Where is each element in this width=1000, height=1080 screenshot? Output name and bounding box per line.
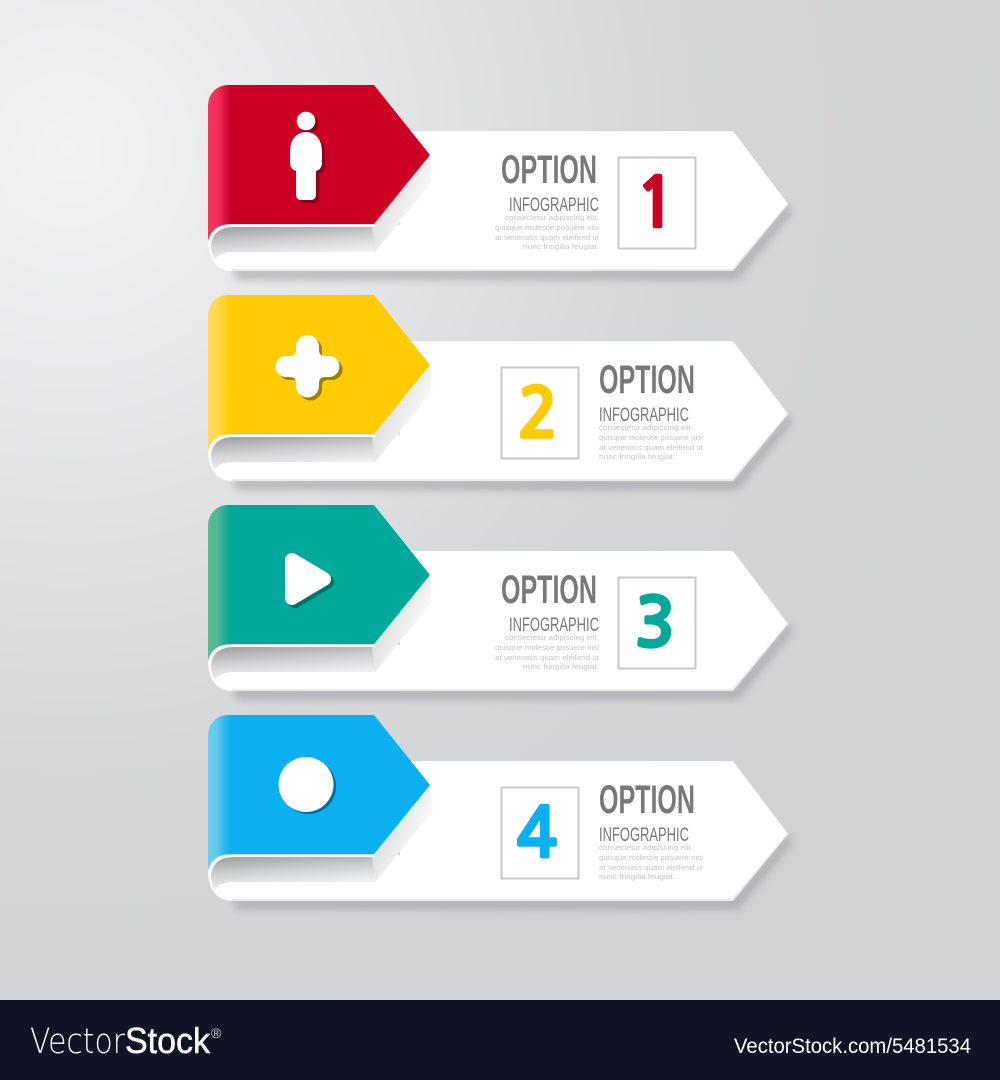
- number box: 2: [517, 381, 559, 448]
- number box: [502, 788, 578, 878]
- icon: circle: [278, 757, 336, 814]
- body text: quisque molestie posuere nisi: [599, 433, 703, 442]
- heading: OPTION: [501, 148, 597, 192]
- number box: 1: [635, 171, 677, 238]
- body text: [599, 843, 704, 881]
- tip cast shadow: [372, 156, 432, 252]
- footer bar: [0, 1000, 1000, 1080]
- icon: play: [292, 560, 327, 601]
- banner shadow: [232, 204, 793, 280]
- footer logo: Vector: [30, 1022, 126, 1062]
- red ribbon: [208, 85, 430, 241]
- number box: [618, 578, 696, 668]
- white arrow band: [208, 131, 788, 271]
- body text: nunc fringilla feugiat.: [523, 242, 599, 251]
- tip cast shadow: [372, 576, 432, 672]
- option 3 banner: [208, 505, 793, 700]
- fold shading: [211, 227, 376, 260]
- number box: [502, 368, 578, 458]
- subheading: INFOGRAPHIC: [509, 615, 599, 636]
- body text: nunc fringilla feugiat.: [599, 452, 675, 461]
- body text: consectetur adipiscing elit.: [505, 213, 599, 222]
- fold shading: [211, 437, 376, 470]
- option text: [495, 148, 600, 251]
- number box: [618, 158, 696, 248]
- body text: consectetur adipiscing elit.: [599, 843, 693, 852]
- option text: [599, 358, 704, 461]
- footer logo: Stock: [125, 1020, 211, 1061]
- white arrow band: [208, 341, 788, 481]
- body text: at venenatis quam eleifend ut: [599, 443, 704, 452]
- body text: at venenatis quam eleifend ut: [495, 653, 600, 662]
- yellow ribbon: [208, 295, 430, 451]
- number box: 4: [516, 801, 558, 868]
- fold shading: [211, 647, 376, 680]
- body text: consectetur adipiscing elit.: [599, 423, 693, 432]
- subheading: INFOGRAPHIC: [599, 825, 689, 846]
- banner shadow: [232, 414, 793, 490]
- icon: plus: [276, 335, 343, 401]
- body text: [495, 213, 600, 251]
- registered mark: ®: [211, 1025, 222, 1041]
- blue ribbon: [208, 715, 430, 871]
- tip cast shadow: [372, 366, 432, 462]
- fold shading: [211, 857, 376, 890]
- body text: at venenatis quam eleifend ut: [599, 863, 704, 872]
- banner shadow: [232, 834, 793, 910]
- body text: nunc fringilla feugiat.: [523, 662, 599, 671]
- teal ribbon: [208, 505, 430, 661]
- option text: [495, 568, 600, 671]
- heading: OPTION: [501, 568, 597, 612]
- heading: OPTION: [599, 778, 695, 822]
- body text: [495, 633, 600, 671]
- body text: quisque molestie posuere nisi: [495, 223, 599, 232]
- body text: consectetur adipiscing elit.: [505, 633, 599, 642]
- number box: 3: [634, 591, 676, 658]
- footer id: VectorStock.com/5481534: [734, 1035, 971, 1058]
- white arrow band: [208, 761, 788, 901]
- option 2 banner: [208, 295, 793, 490]
- subheading: INFOGRAPHIC: [599, 405, 689, 426]
- icon: person: [290, 112, 325, 203]
- footer logo: [30, 1020, 211, 1062]
- option 1 banner: [208, 85, 793, 280]
- option 4 banner: [208, 715, 793, 910]
- banner shadow: [232, 624, 793, 700]
- tip cast shadow: [372, 786, 432, 882]
- body text: [599, 423, 704, 461]
- heading: OPTION: [599, 358, 695, 402]
- body text: quisque molestie posuere nisi: [599, 853, 703, 862]
- body text: quisque molestie posuere nisi: [495, 643, 599, 652]
- option text: [599, 778, 704, 881]
- subheading: INFOGRAPHIC: [509, 195, 599, 216]
- white arrow band: [208, 551, 788, 691]
- body text: at venenatis quam eleifend ut: [495, 233, 600, 242]
- body text: nunc fringilla feugiat.: [599, 872, 675, 881]
